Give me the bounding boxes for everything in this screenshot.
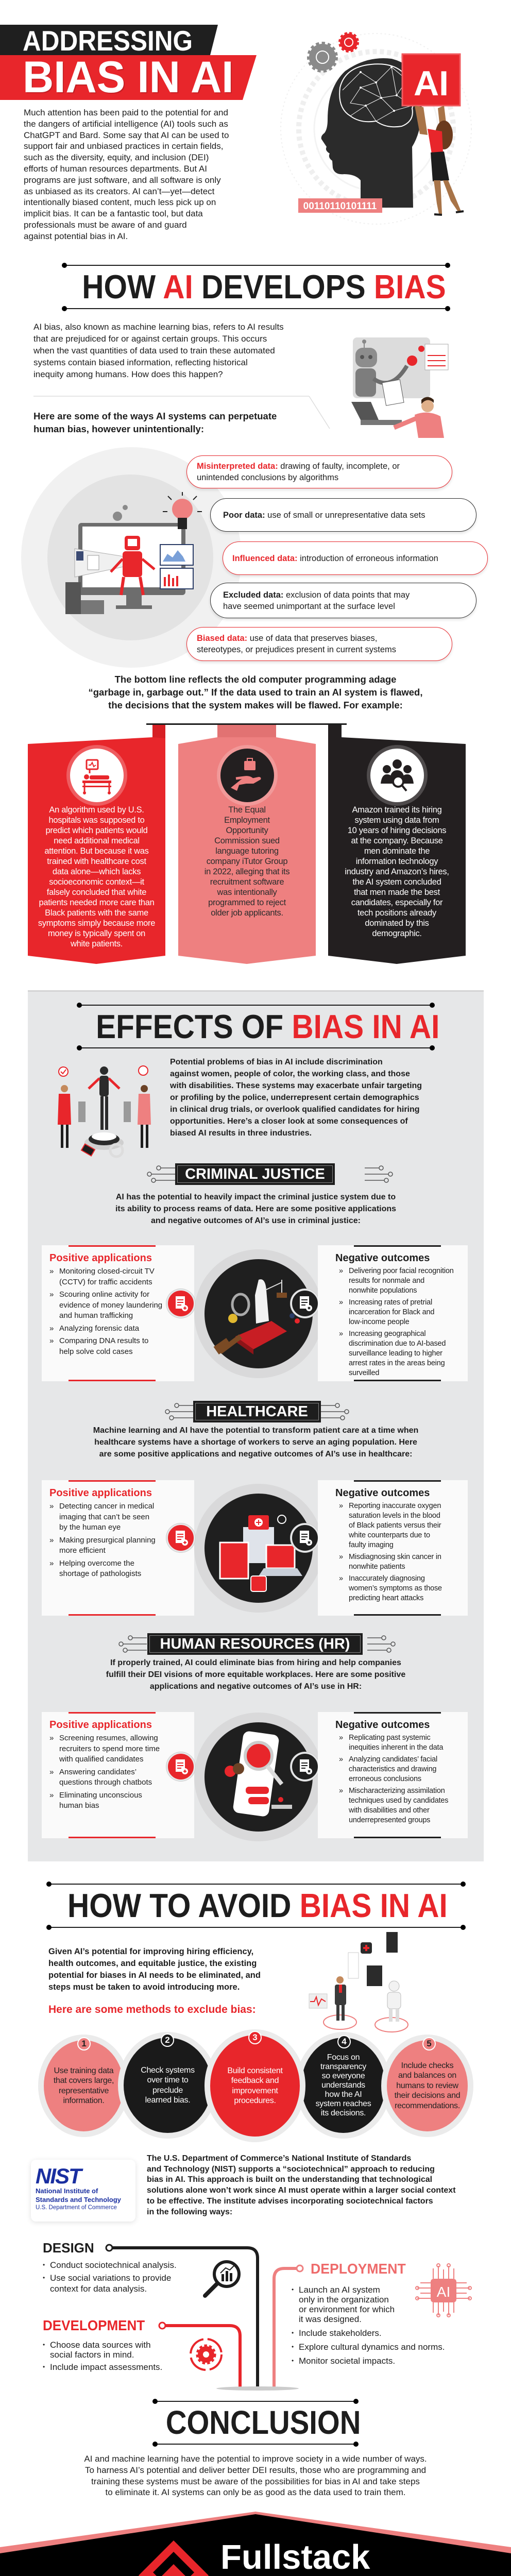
title banner: [0, 25, 257, 102]
pill: excluded data: Excluded data: exclusion of data points that may: [223, 590, 410, 600]
deployment bullets: or environment for which: [299, 2304, 395, 2314]
design label: DESIGN: [43, 2240, 94, 2256]
card text: the AI system concluded: [353, 877, 441, 887]
HR: positive applications: Eliminating unconscious: [59, 1791, 142, 1799]
methods: five circles: 2: [165, 2035, 170, 2045]
label: human resources: HUMAN RESOURCES (HR): [160, 1636, 350, 1652]
lead-in: ways AI perpetuates bias: human bias, however unintentionally:: [33, 423, 204, 434]
healthcare intro: are some positive applications and negative outcomes of AI’s use in healthcare:: [99, 1450, 412, 1459]
intro paragraph: programs are just software, and all software is only: [24, 175, 221, 185]
effects intro paragraph: opportunities. Here’s a closer look at some consequences of: [170, 1117, 408, 1126]
healthcare: negative outcomes: Reporting inaccurate oxygen: [349, 1502, 441, 1510]
pill: poor data: Poor data: use of small or unrepresentative data sets: [223, 510, 425, 519]
criminal justice: negative outcomes: low-income people: [349, 1318, 409, 1326]
HR: positive applications: recruiters to spend more time: [59, 1744, 160, 1753]
title text line 1: ADDRESSING: [23, 25, 193, 57]
icon: hand with briefcase: [220, 749, 274, 802]
NIST logo card: National Institute of: [36, 2187, 98, 2195]
criminal justice: negative outcomes: nonwhite populations: [349, 1286, 417, 1295]
healthcare: positive applications: Helping overcome the: [59, 1559, 134, 1567]
deployment step: [292, 2261, 445, 2366]
effects intro paragraph: Potential problems of bias in AI include discrimination: [170, 1058, 383, 1066]
bottom line paragraph: the decisions that the system makes will be flawed. For example:: [108, 700, 403, 710]
card text: dominated by this: [365, 919, 429, 928]
development label: DEVELOPMENT: [43, 2317, 145, 2333]
healthcare: positive applications: by the human eye: [59, 1523, 121, 1532]
card text: data alone—which lacks: [53, 867, 141, 876]
healthcare: central illustration: [166, 1484, 318, 1613]
healthcare: positive applications: shortage of pathologists: [59, 1569, 141, 1578]
intro paragraph: Much attention has been paid to the potential for and: [24, 108, 228, 117]
NIST paragraph: and Technology (NIST) supports a “sociotechnical” approach to reducing: [147, 2165, 435, 2174]
methods lead-in: Here are some methods to exclude bias:: [48, 2004, 256, 2015]
HR: negative outcomes: characteristics and drawing: [349, 1765, 436, 1773]
criminal justice intro: [115, 1193, 396, 1225]
effects intro paragraph: with disabilities. These systems may exacerbate unfair targeting: [170, 1081, 422, 1090]
HR: positive applications: [42, 1712, 194, 1838]
HR: positive applications: Screening resumes, allowing: [59, 1734, 158, 1742]
paragraph: what is AI bias: [33, 322, 284, 379]
paragraph: what is AI bias: that are prejudiced for or against certain groups. This occurs: [33, 334, 267, 344]
criminal justice: positive applications: Scouring online activity for: [59, 1290, 149, 1299]
criminal justice: negative outcomes: surveilled: [349, 1369, 379, 1377]
title band: black: [0, 25, 218, 55]
method 4: system reaches: [316, 2099, 371, 2108]
healthcare: positive applications: imaging that can’t be seen: [59, 1513, 149, 1521]
paragraph: what is AI bias: when the vast quantities of data used to train these automated: [33, 346, 275, 355]
criminal justice intro: its ability to process reams of data. Here are some positive applications: [115, 1205, 396, 1213]
methods: five circles: 5: [427, 2039, 432, 2048]
method 4: how the AI: [325, 2090, 362, 2099]
heading: How AI develops bias: HOW AI DEVELOPS BIAS: [82, 268, 446, 306]
method 5: humans to review: [396, 2081, 458, 2090]
pill: influenced data: Influenced data: introduction of erroneous information: [232, 553, 438, 563]
criminal justice: positive applications: help solve cold cases: [59, 1347, 133, 1356]
label: healthcare: HEALTHCARE: [206, 1403, 308, 1420]
card text: need additional medical: [54, 836, 140, 845]
methods: five circles: 4: [342, 2037, 347, 2046]
conclusion paragraph: AI and machine learning have the potential to improve society in a wide number of ways.: [84, 2454, 427, 2464]
method 5: and balances on: [398, 2071, 456, 2080]
card text: information technology: [356, 857, 438, 866]
HR: negative outcomes: Negative outcomes: [335, 1719, 430, 1731]
criminal justice intro: and negative outcomes of AI’s use in criminal justice:: [151, 1216, 361, 1225]
label: criminal justice: [147, 1163, 393, 1185]
method 1: Use training data: [54, 2066, 113, 2075]
logo wordmark: Fullstack: [220, 2538, 370, 2576]
card text: Black patients with the same: [45, 908, 148, 918]
icon: gear with arrows: [188, 2336, 225, 2372]
icon: people with magnifier: [370, 749, 424, 802]
healthcare intro: Machine learning and AI have the potential to transform patient care at a time when: [93, 1426, 418, 1435]
NIST paragraph: [147, 2154, 456, 2216]
HR intro: If properly trained, AI could eliminate bias from hiring and help companies: [110, 1658, 401, 1667]
healthcare: negative outcomes: faulty imaging: [349, 1541, 394, 1549]
criminal justice: negative outcomes: Delivering poor facial recognition: [349, 1267, 454, 1275]
healthcare: negative outcomes: of Black patients versus their: [349, 1521, 441, 1530]
NIST logo card: [31, 2160, 135, 2222]
method 1: [44, 2040, 124, 2131]
method 2: [124, 2038, 212, 2133]
pill: biased data: stereotypes, or prejudices present in current systems: [197, 645, 396, 654]
method 4: its decisions.: [321, 2108, 366, 2117]
HR: negative outcomes: Analyzing candidates’ facial: [349, 1755, 437, 1764]
method 5: [387, 2040, 468, 2131]
method 4: [301, 2038, 385, 2133]
card: Amazon hiring: [328, 725, 466, 964]
bottom line paragraph: “garbage in, garbage out.” If the data used to train an AI system is flawed,: [89, 687, 422, 698]
card text: language tutoring: [215, 846, 279, 856]
avoid intro paragraph: potential for biases in AI needs to be eliminated, and: [48, 1971, 261, 1980]
criminal justice: positive applications: (CCTV) for traffic accidents: [59, 1278, 152, 1286]
card text: The Equal: [228, 805, 266, 815]
effects intro paragraph: [170, 1058, 422, 1138]
design bullets: Use social variations to provide: [50, 2273, 171, 2283]
criminal justice: negative outcomes: Negative outcomes: [335, 1252, 430, 1264]
NIST logo card: U.S. Department of Commerce: [36, 2205, 117, 2211]
method 3: Build consistent: [227, 2066, 283, 2075]
method 2: over time to: [147, 2076, 188, 2084]
effects intro paragraph: against women, people of color, the working class, and those: [170, 1070, 410, 1078]
intro paragraph: professionals must be aware of and guard: [24, 220, 187, 230]
card text: Commission sued: [214, 836, 280, 845]
HR intro: applications and negative outcomes of AI’s use in HR:: [150, 1682, 362, 1691]
bottom line paragraph: [89, 674, 422, 710]
footer: [0, 2509, 511, 2576]
pill: excluded data: have seemed unimportant at the surface level: [223, 602, 395, 611]
healthcare: negative outcomes: [318, 1480, 468, 1616]
label: human resources: [118, 1633, 396, 1655]
card: EEOC iTutor: [178, 725, 316, 964]
card text: attention. But because it was: [44, 846, 149, 856]
divider: [33, 396, 330, 429]
method 5: their decisions and: [395, 2091, 460, 2100]
connector lines: design / development / deployment: [105, 2244, 304, 2391]
paragraph: what is AI bias: inequity among humans. How does this happen?: [33, 369, 223, 379]
method 4: transparency: [320, 2062, 366, 2071]
NIST logo card: NIST: [36, 2164, 81, 2188]
avoid intro paragraph: [48, 1947, 261, 1992]
label: healthcare: [165, 1401, 349, 1422]
method 1: information.: [63, 2096, 104, 2105]
criminal justice: positive applications: Monitoring closed-circuit TV: [59, 1267, 155, 1276]
conclusion paragraph: training these systems must be aware of the possibilities for bias in AI and take steps: [91, 2477, 420, 2486]
HR intro: [106, 1658, 405, 1691]
illustration: doctor and robot with screens: [309, 1932, 408, 2032]
card text: [345, 805, 449, 938]
healthcare: negative outcomes: predicting heart attacks: [349, 1594, 423, 1602]
conclusion paragraph: [0, 2453, 511, 2498]
lead-in: ways AI perpetuates bias: [33, 411, 277, 434]
criminal justice: positive applications: Analyzing forensic data: [59, 1324, 139, 1332]
design bullets: Conduct sociotechnical analysis.: [50, 2260, 177, 2270]
card text: white patients.: [71, 939, 123, 948]
card text: industry and Amazon’s hires,: [345, 867, 449, 876]
deployment bullets: Include stakeholders.: [299, 2328, 382, 2338]
intro paragraph: against potential bias in AI.: [24, 231, 128, 241]
healthcare: negative outcomes: Inaccurately diagnosing: [349, 1574, 425, 1583]
criminal justice: negative outcomes: incarceration for Black and: [349, 1308, 434, 1316]
design bullets: [43, 2260, 177, 2294]
method 4: Focus on: [327, 2053, 360, 2062]
card text: 10 years of hiring decisions: [348, 826, 446, 835]
pill: poor data: [210, 498, 476, 532]
card text: symptoms simply because more: [38, 919, 155, 928]
criminal justice: positive applications: [42, 1245, 194, 1381]
heading: effects of bias in AI: EFFECTS OF BIAS IN AI: [96, 1008, 439, 1045]
deployment bullets: it was designed.: [299, 2314, 362, 2324]
card text: money is typically spent on: [48, 929, 145, 938]
card text: trained with healthcare cost: [47, 857, 146, 866]
healthcare: negative outcomes: saturation levels in the blood: [349, 1512, 440, 1520]
healthcare: negative outcomes: women’s symptoms as those: [349, 1584, 442, 1592]
card text: recruitment software: [210, 877, 284, 887]
hero illustration: head with AI block: 00110110101111: [303, 201, 377, 212]
card text: at the company. Because: [351, 836, 443, 845]
effects intro paragraph: biased AI results in three industries.: [170, 1129, 312, 1138]
card text: that men made the best: [354, 888, 440, 897]
healthcare: positive applications: Detecting cancer in medical: [59, 1502, 154, 1511]
icon: hospital bed: [70, 749, 124, 802]
effects intro paragraph: in clinical drug trials, or overlook qualified candidates for hiring: [170, 1105, 420, 1114]
illustration: robot and man at laptop: [351, 337, 448, 438]
card text: Amazon trained its hiring: [352, 805, 442, 815]
criminal justice: negative outcomes: Increasing geographical: [349, 1330, 425, 1338]
HR: positive applications: questions through chatbots: [59, 1778, 152, 1787]
card text: socioeconomic context—it: [49, 877, 144, 887]
criminal justice: negative outcomes: discrimination due to AI-based: [349, 1340, 446, 1348]
NIST paragraph: to be effective. The institute advises incorporating sociotechnical factors: [147, 2197, 433, 2206]
method 3: feedback and: [231, 2076, 279, 2085]
card text: demographic.: [372, 929, 422, 938]
title band: red: [0, 55, 257, 100]
pill: biased data: Biased data: use of data that preserves biases,: [197, 634, 377, 643]
intro paragraph: as unbiased as its creators. AI can’t—yet—detect: [24, 187, 214, 196]
deployment label: DEPLOYMENT: [311, 2261, 406, 2277]
HR: negative outcomes: erroneous conclusions: [349, 1775, 421, 1783]
intro paragraph: ChatGPT and Bard. Some say that AI can be used to: [24, 130, 229, 140]
method 4: so everyone: [322, 2071, 365, 2080]
HR: negative outcomes: Replicating past systemic: [349, 1734, 431, 1742]
deployment bullets: only in the organization: [299, 2295, 389, 2304]
deployment bullets: Monitor societal impacts.: [299, 2356, 395, 2366]
number badges: [77, 2037, 91, 2050]
number badges: 1: [81, 2039, 87, 2048]
NIST paragraph: in the following ways:: [147, 2208, 232, 2216]
criminal justice: negative outcomes: arrest rates in the areas being: [349, 1359, 445, 1367]
bottom line paragraph: The bottom line reflects the old computer programming adage: [115, 674, 396, 685]
criminal justice: positive applications: and human trafficking: [59, 1311, 133, 1320]
avoid intro paragraph: Given AI’s potential for improving hiring efficiency,: [48, 1947, 253, 1956]
development bullets: social factors in mind.: [50, 2350, 134, 2360]
healthcare intro: healthcare systems have a shortage of workers to serve an aging population. Here: [94, 1438, 417, 1447]
intro paragraph: [24, 108, 229, 241]
method 3: improvement: [232, 2087, 278, 2095]
icon: AI chip: [415, 2263, 472, 2317]
deployment bullets: Launch an AI system: [299, 2285, 380, 2295]
development bullets: [43, 2340, 162, 2372]
paragraph: what is AI bias: systems contain biased information, reflecting historical: [33, 358, 248, 367]
criminal justice: positive applications: Comparing DNA results to: [59, 1336, 148, 1345]
NIST paragraph: The U.S. Department of Commerce’s National Institute of Standards: [147, 2154, 411, 2163]
method 3: [210, 2035, 300, 2137]
card text: Opportunity: [226, 826, 268, 835]
card text: system using data from: [355, 816, 439, 825]
card text: candidates, especially for: [351, 898, 442, 907]
method 1: that covers large,: [54, 2076, 114, 2085]
card text: [38, 805, 155, 948]
deployment bullets: [292, 2285, 445, 2366]
method 4: understands: [321, 2080, 365, 2090]
card text: hospitals was supposed to: [48, 816, 145, 825]
card text: An algorithm used by U.S.: [49, 805, 144, 815]
HR: positive applications: with qualified candidates: [59, 1755, 143, 1764]
card text: programmed to reject: [208, 898, 286, 907]
card text: men dominate the: [364, 846, 430, 856]
card text: [205, 805, 289, 918]
card text: was intentionally: [217, 888, 277, 897]
intro paragraph: support fair and unbiased practices in certain fields,: [24, 141, 223, 151]
intro paragraph: efforts of human resources departments. But AI: [24, 164, 207, 174]
card: hospital algorithm: [28, 725, 165, 964]
healthcare: positive applications: more efficient: [59, 1546, 106, 1555]
intro paragraph: implicit bias. It can be a fantastic tool, but data: [24, 209, 203, 218]
card text: company iTutor Group: [207, 857, 287, 866]
healthcare: positive applications: Positive applications: [49, 1487, 152, 1499]
illustration: people around robot: [58, 1065, 151, 1158]
panel: effects of bias in AI: [28, 990, 484, 1861]
healthcare intro: [93, 1426, 418, 1459]
examples connector bar: [146, 723, 347, 725]
intro paragraph: the dangers of artificial intelligence (AI) tools such as: [24, 119, 228, 129]
HR: negative outcomes: Mischaracterizing assimilation: [349, 1787, 445, 1795]
deployment bullets: Explore cultural dynamics and norms.: [299, 2342, 445, 2352]
design bullets: context for data analysis.: [50, 2284, 147, 2294]
HR: negative outcomes: with disabilities and other: [349, 1806, 430, 1815]
card text: Employment: [224, 816, 270, 825]
healthcare: positive applications: [42, 1480, 194, 1616]
card text: falsely concluded that white: [47, 888, 146, 897]
avoid intro paragraph: health outcomes, and equitable justice, the existing: [48, 1959, 257, 1968]
HR: positive applications: Positive applications: [49, 1719, 152, 1731]
method 5: recommendations.: [395, 2102, 460, 2110]
avoid intro paragraph: steps must be taken to avoid introducing more.: [48, 1982, 240, 1992]
healthcare: negative outcomes: Negative outcomes: [335, 1487, 430, 1499]
conclusion paragraph: to eliminate it. AI systems can only be as good as the data used to train them.: [105, 2487, 406, 2497]
method 1: representative: [59, 2087, 109, 2095]
criminal justice intro: AI has the potential to heavily impact the criminal justice system due to: [116, 1193, 396, 1201]
criminal justice: positive applications: Positive applications: [49, 1252, 152, 1264]
HR: negative outcomes: [318, 1712, 468, 1838]
design step: [43, 2240, 177, 2294]
icon: magnifier with chart: [203, 2260, 241, 2298]
NIST logo card: Standards and Technology: [36, 2196, 121, 2203]
healthcare: negative outcomes: Misdiagnosing skin cancer in: [349, 1553, 441, 1561]
title text line 2: BIAS IN AI: [23, 53, 233, 102]
pill: misinterpreted data: Misinterpreted data: drawing of faulty, incomplete, or: [197, 462, 400, 471]
card text: older job applicants.: [211, 908, 283, 918]
heading: how to avoid bias in AI: HOW TO AVOID BIAS IN AI: [67, 1887, 448, 1924]
HR: negative outcomes: underrepresented groups: [349, 1816, 430, 1824]
methods: five circles: 3: [252, 2032, 258, 2042]
hero illustration: head with AI block: [280, 32, 472, 225]
healthcare: positive applications: Making presurgical planning: [59, 1535, 156, 1545]
HR: positive applications: human bias: [59, 1801, 99, 1810]
card text: tech positions already: [357, 908, 436, 918]
paragraph: what is AI bias: AI bias, also known as machine learning bias, refers to AI results: [33, 322, 284, 332]
criminal justice: negative outcomes: Increasing rates of pretrial: [349, 1298, 432, 1307]
conclusion paragraph: To harness AI’s potential and deliver better DEI results, those who are programming and: [85, 2465, 426, 2475]
method 5: Include checks: [401, 2061, 453, 2070]
effects intro paragraph: or profiling by the police, underrepresent certain demographics: [170, 1093, 419, 1102]
hero illustration: head with AI block: AI: [414, 64, 449, 103]
logo mark: [139, 2540, 209, 2576]
HR intro: fulfill their DEI visions of more equitable workplaces. Here are some positive: [106, 1670, 405, 1679]
intro paragraph: such as the diversity, equity, and inclusion (DEI): [24, 152, 209, 162]
NIST paragraph: solutions alone won’t work since AI must operate within a larger social context: [147, 2186, 456, 2195]
intro paragraph: intentionally biased content, much less pick up on: [24, 197, 216, 207]
healthcare: negative outcomes: nonwhite patients: [349, 1563, 405, 1571]
development step: [43, 2317, 162, 2372]
lead-in: ways AI perpetuates bias: Here are some of the ways AI systems can perpetuate: [33, 411, 277, 421]
NIST paragraph: bias in AI. This approach is built on the understanding that technological: [147, 2175, 432, 2184]
pill: misinterpreted data: unintended conclusions by algorithms: [197, 473, 338, 482]
criminal justice: positive applications: evidence of money laundering: [59, 1300, 162, 1310]
HR: positive applications: Answering candidates’: [59, 1767, 137, 1776]
criminal justice: central illustration: [166, 1249, 318, 1378]
heading: conclusion: CONCLUSION: [166, 2404, 361, 2441]
methods: five circles: [38, 2029, 473, 2142]
method 2: learned bias.: [145, 2096, 190, 2105]
illustration: grey circles with monitor and robot: [21, 447, 240, 668]
pill: biased data: [186, 627, 452, 661]
method 3: procedures.: [234, 2096, 276, 2105]
HR: negative outcomes: inequities inherent in the data: [349, 1743, 443, 1752]
method 2: preclude: [152, 2086, 183, 2095]
method 2: Check systems: [141, 2066, 195, 2074]
pill: excluded data: [210, 583, 476, 618]
healthcare: negative outcomes: white counterparts due to: [349, 1531, 430, 1539]
pill: misinterpreted data: [186, 455, 452, 488]
HR: negative outcomes: techniques used by candidates: [349, 1797, 448, 1805]
criminal justice: negative outcomes: surveillance leading to higher: [349, 1349, 442, 1358]
HR: central illustration: [166, 1713, 318, 1841]
development bullets: Include impact assessments.: [50, 2362, 162, 2372]
development bullets: Choose data sources with: [50, 2340, 151, 2350]
card text: in 2022, alleging that its: [205, 867, 289, 876]
icon: AI chip: AI: [437, 2284, 450, 2300]
criminal justice: negative outcomes: results for nonmale and: [349, 1277, 424, 1285]
card text: predict which patients would: [46, 826, 147, 835]
pill: influenced data: [223, 541, 488, 575]
label: criminal justice: CRIMINAL JUSTICE: [185, 1166, 325, 1182]
criminal justice: negative outcomes: [318, 1245, 468, 1381]
card text: patients needed more care than: [39, 898, 155, 907]
